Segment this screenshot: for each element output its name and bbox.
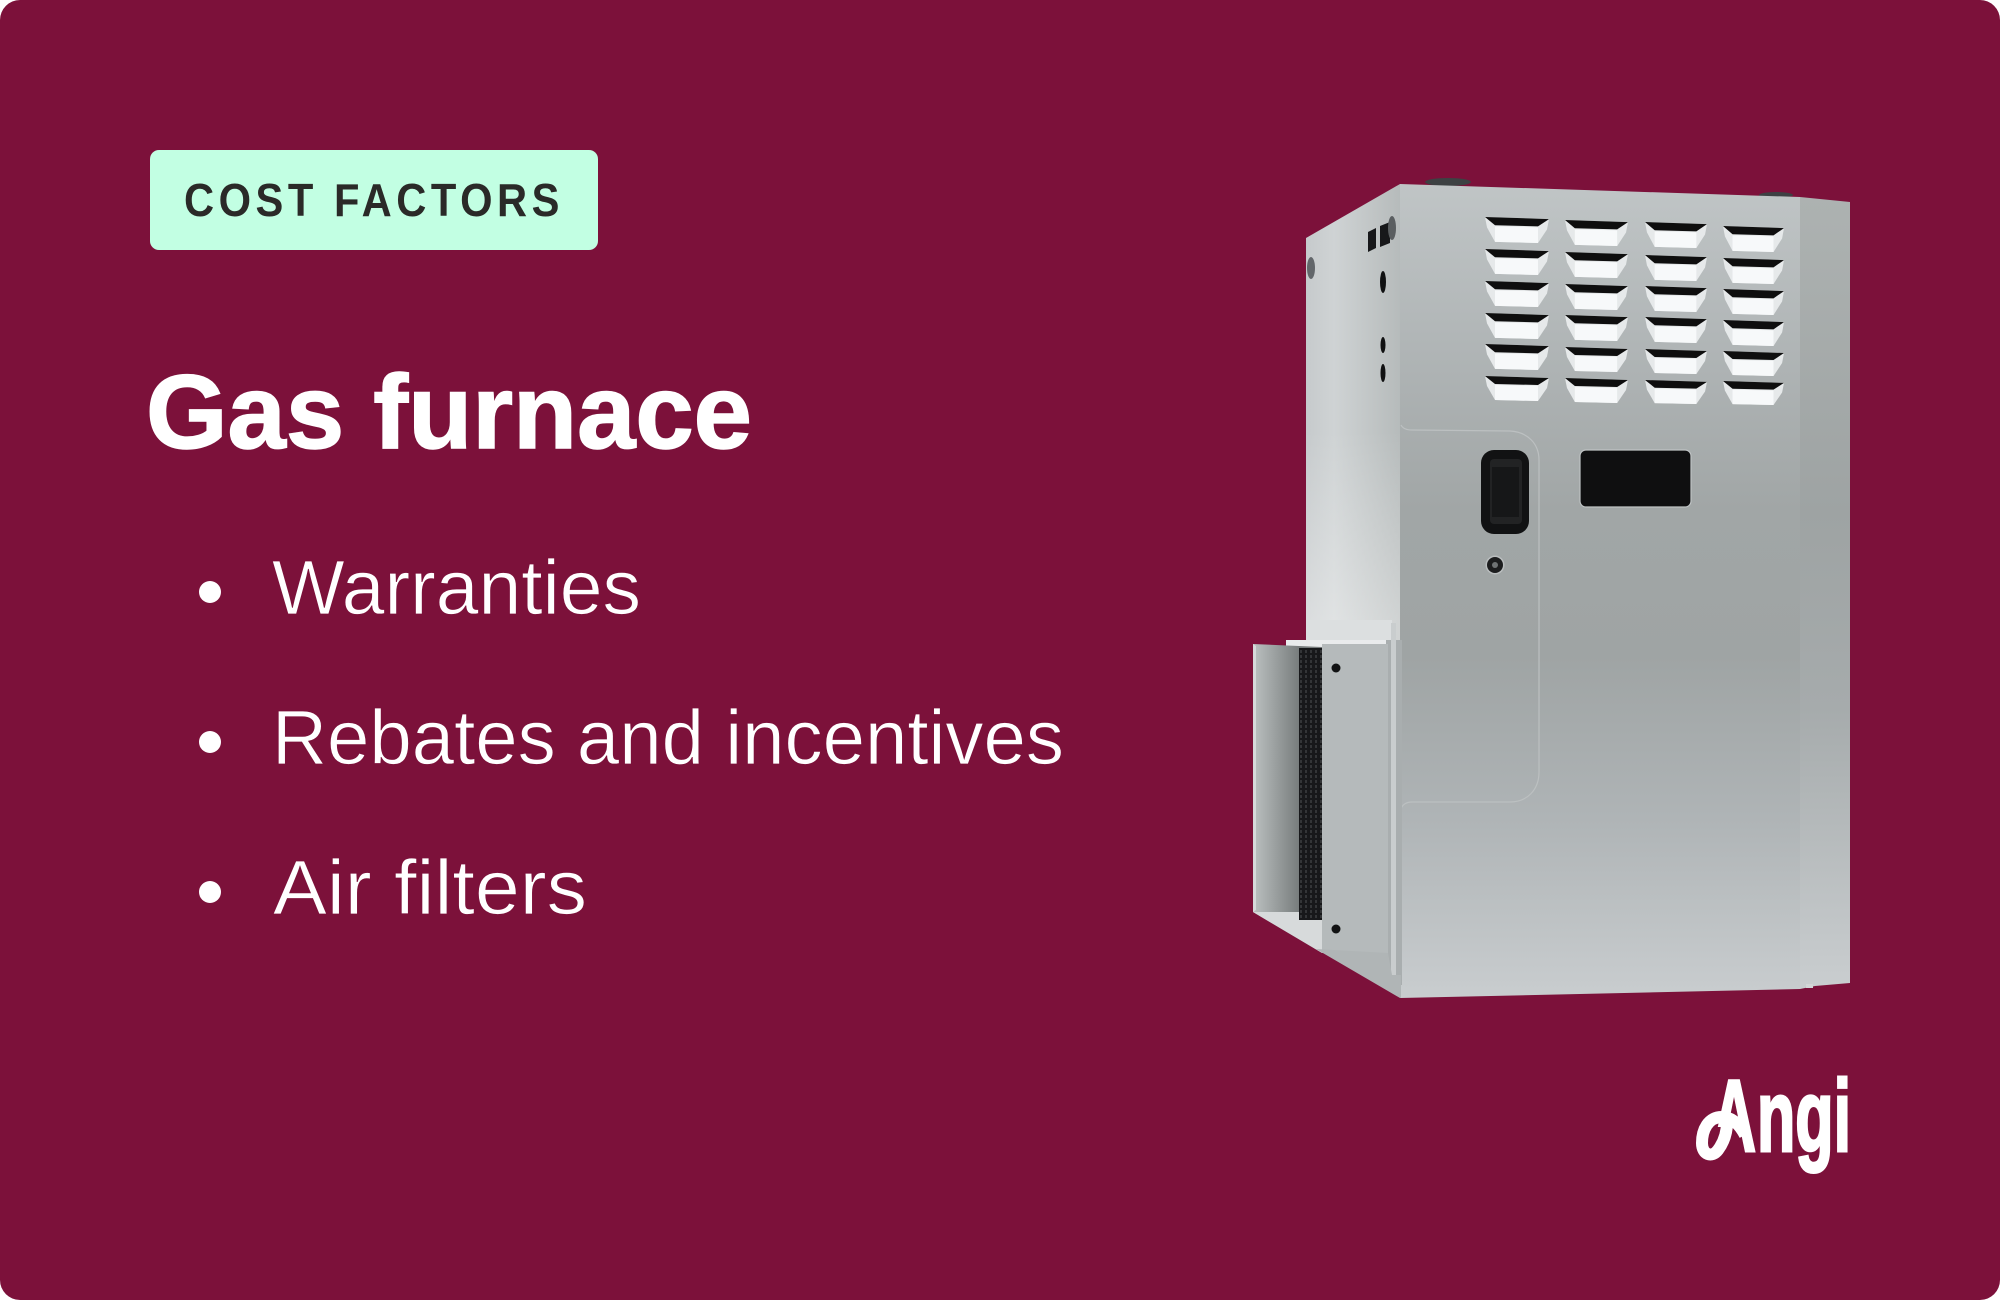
backing strip <box>1386 640 1402 985</box>
logo leg cutout <box>1708 1127 1739 1156</box>
title: Gas furnace <box>146 354 752 471</box>
lower return <box>1316 949 1401 998</box>
logo: Angi <box>1702 1059 1851 1173</box>
top bolts <box>1425 178 1793 198</box>
list item: rebates and incentives: Rebates and incentives <box>272 695 1064 781</box>
housing lower wall <box>1253 912 1322 953</box>
door handle <box>1481 450 1529 534</box>
vent column 1 <box>1485 217 1549 401</box>
logo letter A: A <box>1712 1059 1756 1173</box>
badge: cost factors: COST FACTORS <box>184 174 564 226</box>
logo letters ngi: ngi <box>1757 1059 1851 1173</box>
side panel lower highlight <box>1306 430 1400 650</box>
filter housing <box>1253 620 1402 998</box>
housing outer lip <box>1253 644 1256 912</box>
vent column 3 <box>1645 222 1707 404</box>
cabinet side panel <box>1306 184 1400 650</box>
list of cost factors <box>199 545 1064 931</box>
foot <box>1806 984 1813 988</box>
display window <box>1580 450 1691 507</box>
filter door <box>1322 644 1388 953</box>
door screw <box>1486 556 1504 574</box>
flange <box>1391 623 1396 975</box>
cabinet front panel <box>1400 184 1800 998</box>
housing inner wall <box>1253 644 1322 953</box>
louvre vents <box>1485 217 1784 405</box>
door outline <box>1401 425 1539 809</box>
list item: air filters: Air filters <box>273 845 587 931</box>
vent column 2 <box>1565 220 1628 403</box>
vent column 4 <box>1723 226 1784 405</box>
list item: warranties: Warranties <box>272 545 641 631</box>
side slots and bolts <box>1307 216 1396 382</box>
mounting ledge <box>1286 640 1388 647</box>
upper mounting plate <box>1306 620 1392 642</box>
door screw top <box>1332 664 1340 672</box>
logo swash <box>1702 1117 1745 1154</box>
air filter <box>1299 648 1322 920</box>
door screw bottom <box>1332 924 1340 934</box>
furnace illustration <box>1253 178 1850 998</box>
badge: cost factors <box>150 150 598 250</box>
cabinet right fold <box>1800 197 1850 989</box>
